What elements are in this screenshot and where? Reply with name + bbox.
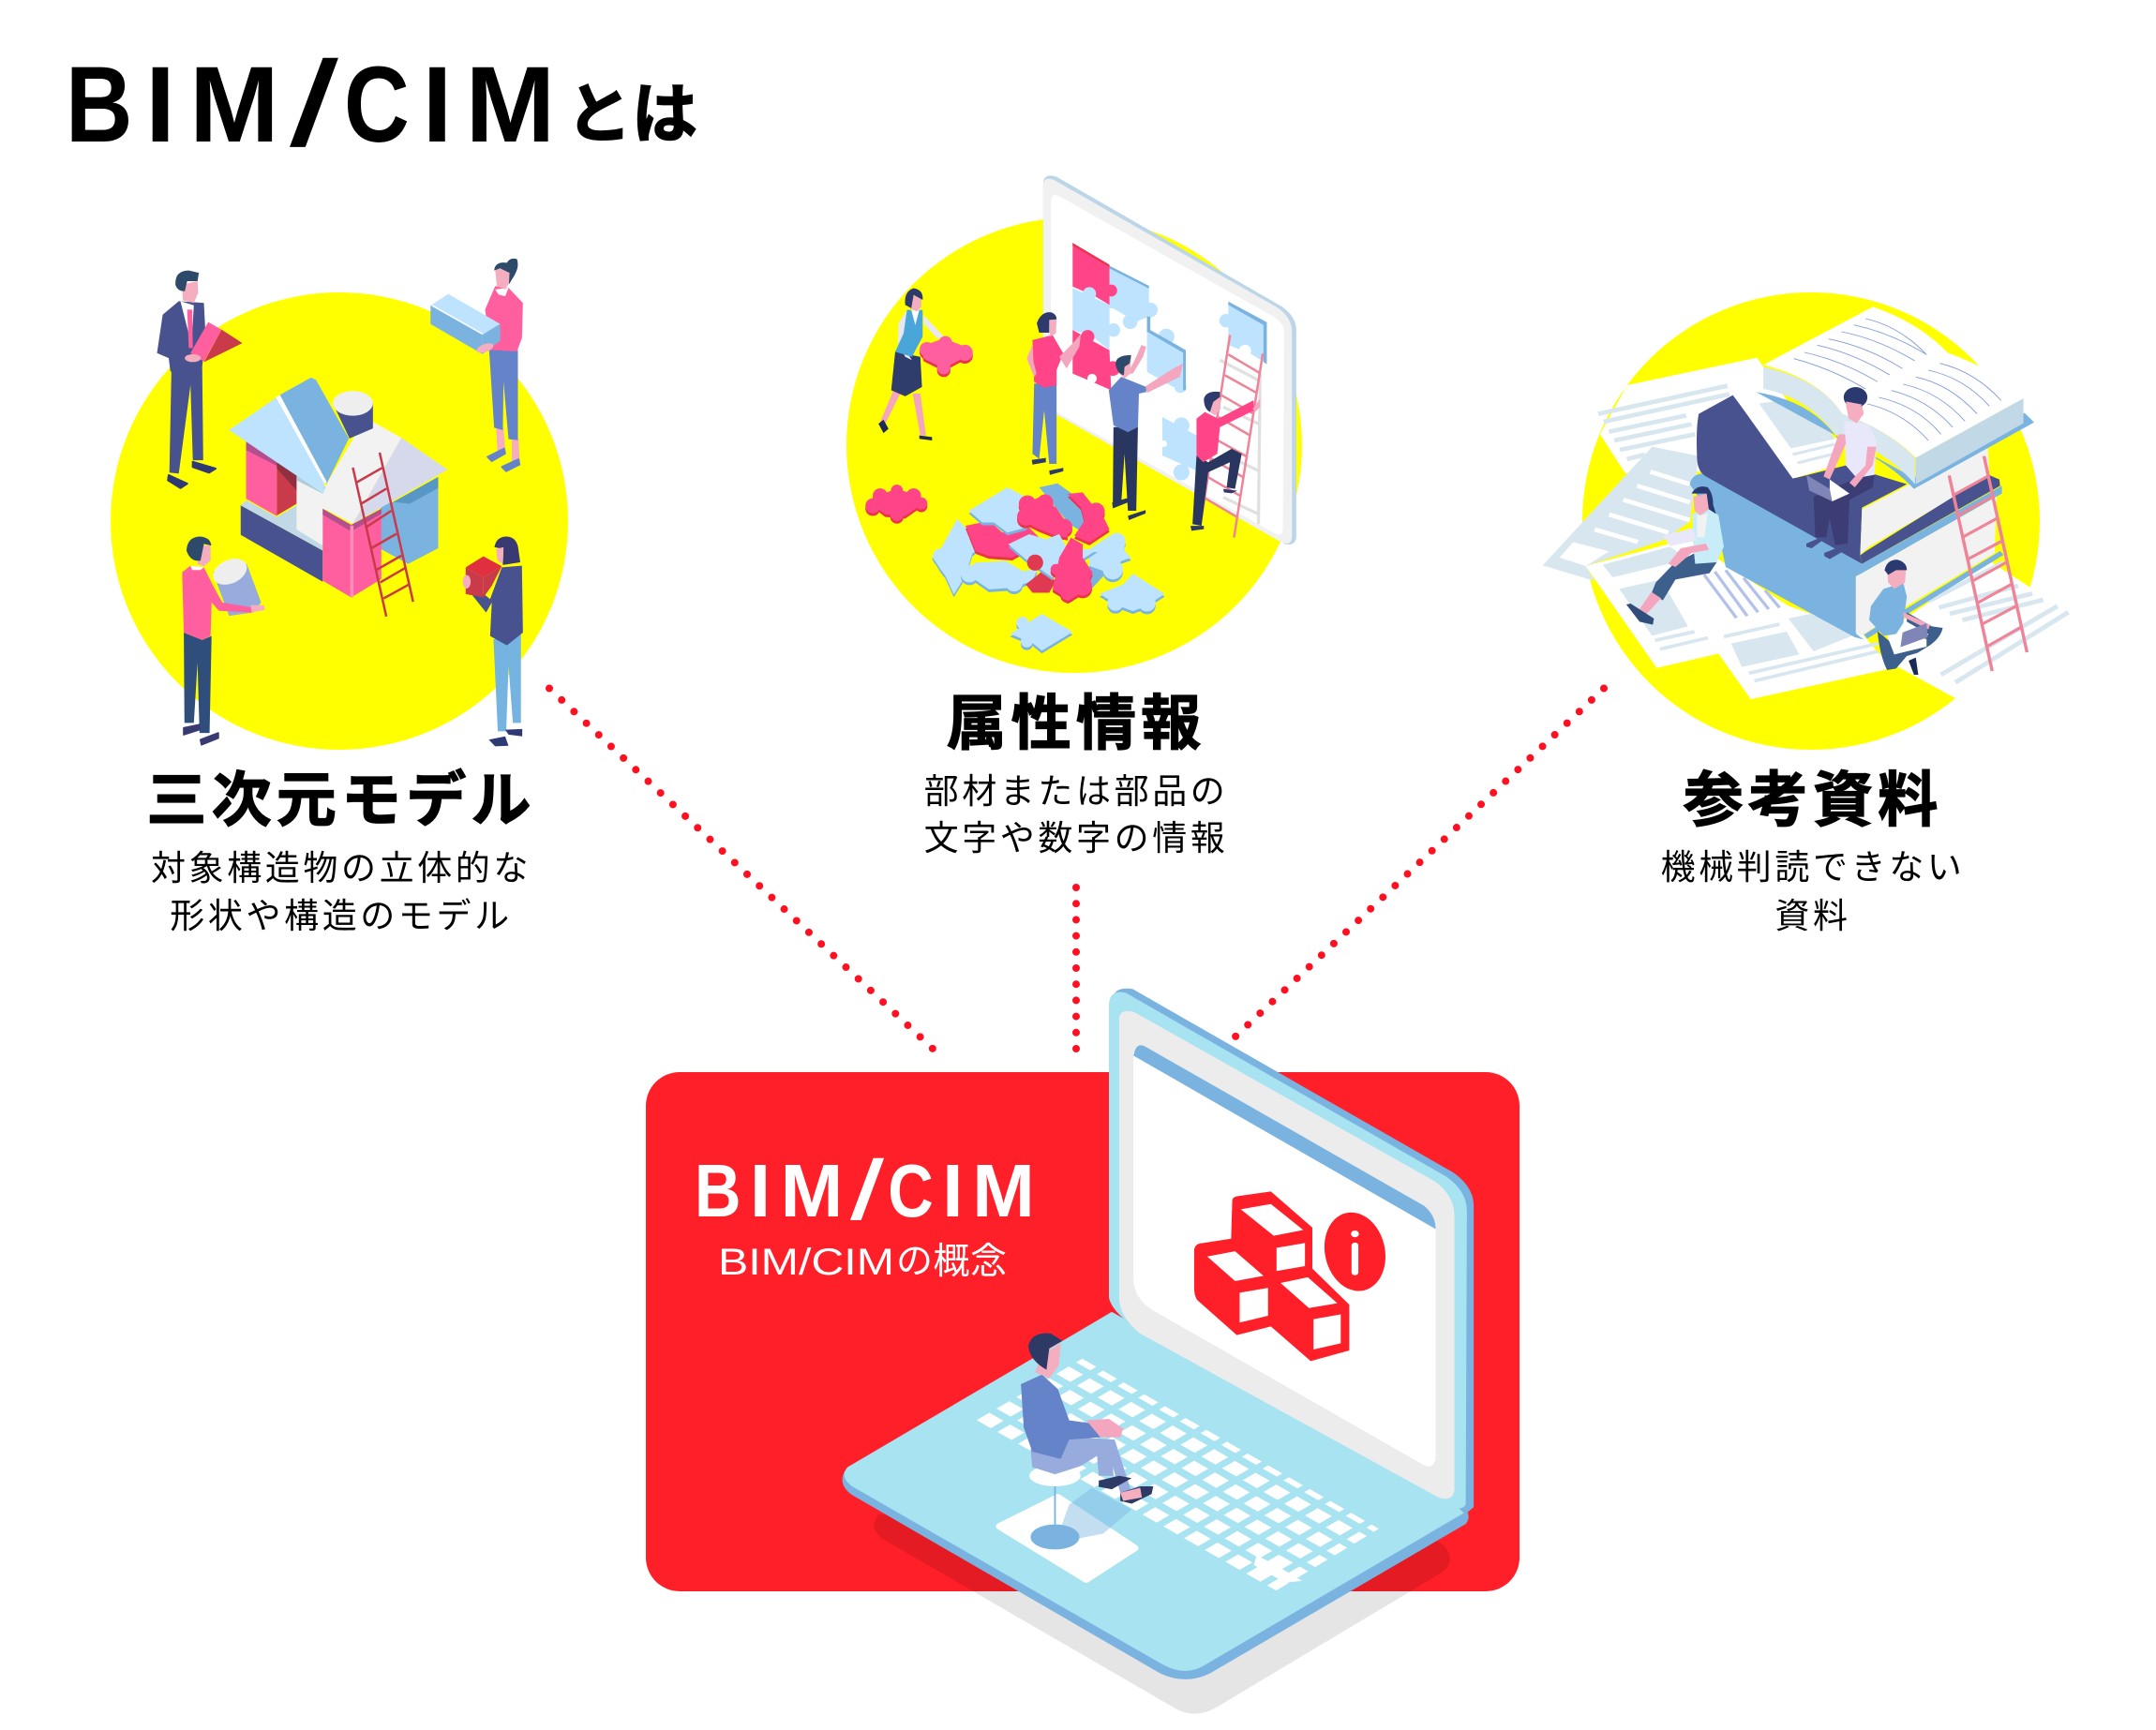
- card title: M: [972, 1149, 1035, 1232]
- panel: 参考資料 illustration: [1543, 292, 2068, 750]
- loose piece: blue floor bottom: [1010, 614, 1072, 650]
- icon: red blocks on screen: [1194, 1191, 1349, 1361]
- description: 属性情報: 部材または部品の: [924, 772, 1228, 811]
- description: 三次元モデル: 対象構造物の立体的な: [151, 849, 532, 887]
- laptop lid: [1109, 989, 1474, 1514]
- description: 参考資料: 資料: [1774, 897, 1851, 935]
- description: 参考資料: 機械判読できない: [1661, 848, 1965, 887]
- card subtitle: BIM/CIM: [718, 1242, 894, 1283]
- card title: /: [851, 1145, 884, 1237]
- title: C: [344, 44, 410, 165]
- description: 三次元モデル: 形状や構造のモデル: [170, 897, 513, 935]
- ladder: [1949, 456, 2027, 671]
- card title: [695, 1145, 1035, 1237]
- title: M: [189, 45, 279, 165]
- card subtitle: の概念: [896, 1242, 1007, 1282]
- title: I: [422, 45, 452, 165]
- description: 属性情報: 文字や数字の情報: [924, 819, 1228, 858]
- card subtitle: [718, 1242, 1007, 1283]
- title: とは: [566, 78, 697, 151]
- panel: red BIM/CIM card: [646, 1072, 1520, 1591]
- title: M: [465, 45, 555, 165]
- card title: I: [942, 1149, 964, 1232]
- paper sheets: [1543, 358, 2068, 699]
- icon: red ladder on house: [352, 453, 413, 617]
- person: woman at puzzle: [1026, 312, 1081, 475]
- person: man in suit holding folder: [157, 271, 243, 488]
- person: man climbing ladder: [1190, 392, 1260, 530]
- icon: info badge: [1319, 1209, 1391, 1294]
- card title: B: [695, 1149, 741, 1232]
- puzzle pile on floor: [932, 484, 1131, 601]
- panel: 三次元モデル illustration: [111, 259, 568, 750]
- heading: 参考資料: 参考資料: [1684, 767, 1942, 834]
- loose piece: blue floor right: [1100, 574, 1164, 611]
- panel: 属性情報 illustration: [846, 175, 1302, 673]
- laptop illustration: [843, 989, 1474, 1714]
- person: man sitting on books with laptop: [1806, 387, 1877, 559]
- card title: M: [781, 1149, 843, 1232]
- ground shadow: [874, 1514, 1450, 1714]
- title: [66, 38, 697, 171]
- card title: I: [750, 1149, 771, 1232]
- laptop base: [843, 1312, 1469, 1679]
- loose piece: pink floor left: [865, 485, 927, 521]
- title: I: [145, 45, 175, 165]
- open book: [1756, 306, 2034, 489]
- person: woman holding blue box: [430, 259, 523, 471]
- heading: 属性情報: 属性情報: [947, 690, 1205, 757]
- icon: isometric house: [229, 378, 447, 597]
- person: man on stool: [1021, 1334, 1153, 1549]
- person: woman sitting reading: [1626, 486, 1724, 625]
- trackpad: [1000, 1498, 1134, 1579]
- dotted connector: 属性情報 to card: [1072, 887, 1080, 1049]
- person: woman holding red cube: [463, 536, 523, 746]
- person: man reaching to puzzle: [1109, 345, 1183, 520]
- ladder on board: [1202, 335, 1263, 538]
- puzzle pieces on board: [1072, 243, 1266, 480]
- keyboard: [970, 1358, 1379, 1594]
- person: man holding cylinder: [182, 536, 264, 745]
- title: B: [66, 44, 132, 165]
- dotted connector: 三次元モデル to card: [549, 688, 933, 1049]
- card title: C: [888, 1148, 934, 1232]
- wall board: [1043, 175, 1296, 544]
- person: woman with vest carrying piece: [878, 288, 973, 440]
- heading: 三次元モデル: 三次元モデル: [146, 767, 536, 834]
- person: man sitting cross-legged with laptop: [1869, 559, 1942, 675]
- title: /: [292, 38, 337, 171]
- dotted connector: 参考資料 to card: [1235, 688, 1604, 1037]
- stacked books: [1690, 382, 2002, 639]
